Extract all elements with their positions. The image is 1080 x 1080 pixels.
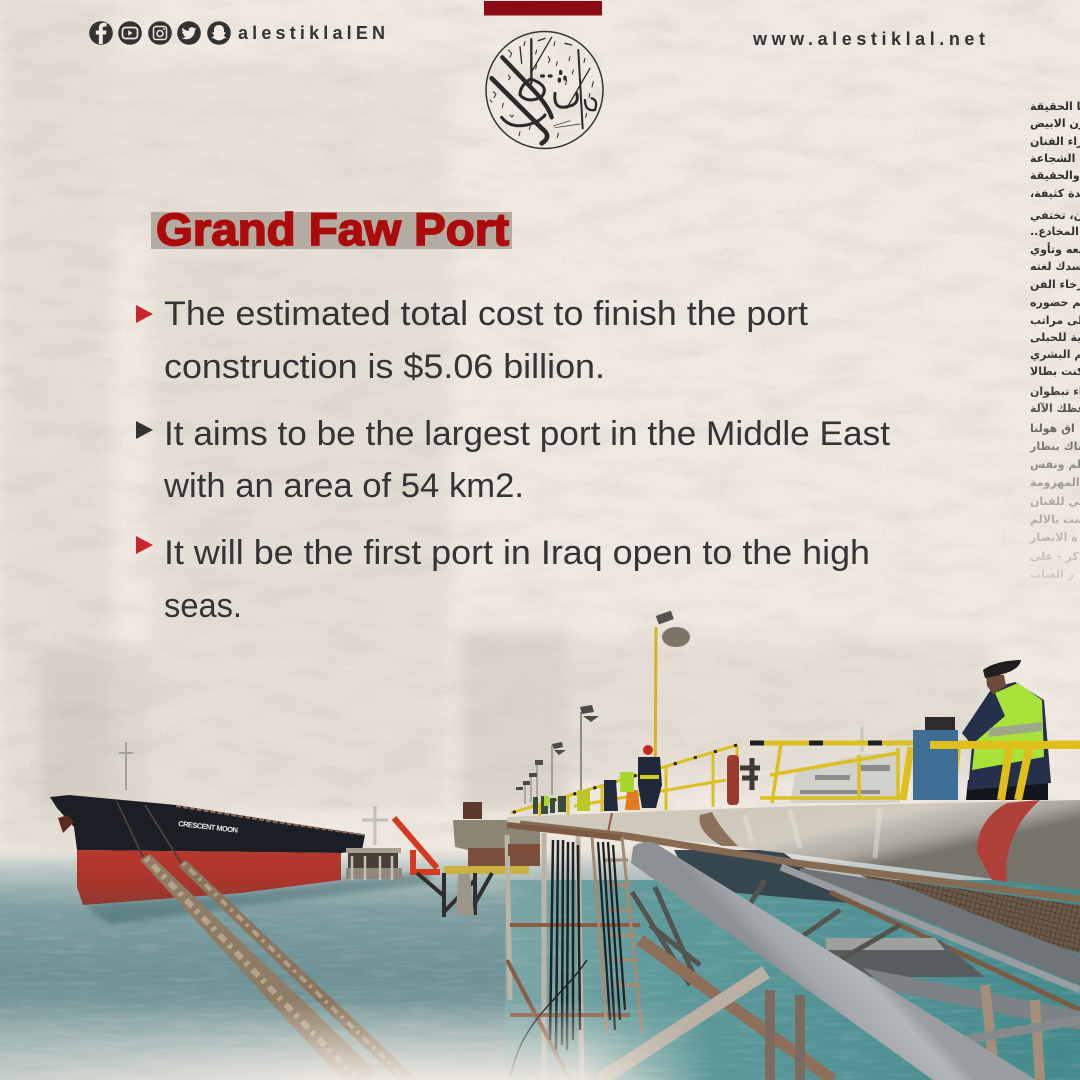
black cables	[550, 840, 580, 1050]
bullet 3 text: seas.	[164, 587, 242, 625]
hi-vis vest	[972, 683, 1044, 770]
red pipe band	[977, 800, 1040, 882]
newspaper clipping column: اق هولنا	[1030, 422, 1075, 435]
rust patch	[699, 812, 738, 846]
icon: twitter	[177, 21, 201, 45]
social handle: alestiklalEN	[238, 23, 385, 43]
bullet 2 text: It aims to be the largest port in the Middle East	[164, 415, 891, 453]
icon: snapchat	[207, 21, 231, 45]
bullet 2 text: with an area of 54 km2.	[163, 467, 524, 505]
social icons	[89, 21, 231, 45]
underside deck grating	[860, 875, 1080, 953]
hull behind pier	[674, 850, 851, 903]
bullet 3: open to high seas	[136, 534, 870, 625]
icon: youtube	[118, 21, 142, 45]
gray steel girder	[800, 868, 1080, 985]
mooring ropes	[117, 802, 418, 1080]
ship name: CRESCENT MOON	[178, 819, 238, 835]
bullet 1 text: The estimated total cost to finish the port	[164, 295, 809, 333]
newspaper clipping column: ر العتاب	[1030, 568, 1074, 581]
distant ship mast	[119, 742, 133, 790]
logo: Al-Estiklal calligraphy seal	[486, 32, 603, 148]
sea water	[0, 846, 1080, 1080]
yellow railings	[511, 743, 1080, 816]
newspaper clipping column: ية للحبلى	[1030, 331, 1080, 344]
website url: www.alestiklal.net	[752, 29, 985, 49]
large gray pipe	[631, 842, 1036, 1080]
cross beam	[826, 940, 985, 977]
distant jetty	[346, 806, 402, 880]
bullet 2: port area	[136, 415, 891, 505]
icon: instagram	[148, 21, 172, 45]
bullet 2 text	[163, 415, 891, 505]
red loading arm	[394, 818, 440, 872]
title text: Grand Faw Port	[156, 204, 509, 255]
newspaper clipping column: الشجاعة	[1030, 152, 1075, 165]
hull reflection	[84, 872, 430, 925]
ship black upper hull	[50, 795, 365, 853]
anchor	[58, 815, 74, 833]
railing over man	[930, 745, 1080, 800]
tanker ship Crescent Moon	[50, 795, 430, 925]
jetty frames and cables	[507, 825, 642, 1080]
newspaper clipping column	[1029, 100, 1080, 581]
deck railing	[176, 806, 365, 835]
worker with red helmet	[638, 745, 662, 808]
pier support truss	[600, 880, 1080, 1080]
steel frames	[507, 833, 582, 1080]
bullet 3 text	[164, 534, 870, 625]
newspaper clipping column: كر - على	[1030, 550, 1079, 563]
icon: facebook	[89, 21, 113, 45]
trousers	[966, 780, 1048, 800]
bullet 1: port cost	[136, 295, 809, 386]
valve post	[727, 755, 760, 805]
white ship behind the railing	[790, 727, 900, 803]
bullet 3 text: It will be the first port in Iraq open to the high	[164, 534, 870, 572]
bullet 1 text	[164, 295, 809, 386]
ship red lower hull	[77, 850, 341, 905]
bullet 1 text: construction is $5.06 billion.	[164, 348, 605, 386]
top red bar	[484, 1, 602, 16]
title: Grand Faw Port	[151, 204, 512, 255]
workers on pier	[533, 745, 662, 814]
newspaper clipping column: ة الابصار	[1029, 531, 1078, 544]
jacket	[962, 682, 1051, 790]
main white pipeline	[507, 800, 1080, 890]
bullet arrow dark	[136, 421, 153, 439]
bullet arrow red	[136, 536, 153, 554]
near jetty platform	[417, 802, 540, 917]
bullet arrow red	[136, 305, 153, 323]
lower gray pipe	[863, 968, 1080, 1030]
ladder	[592, 837, 642, 1033]
right railing	[750, 740, 1080, 746]
rusty rail below pipeline	[520, 824, 1080, 899]
title highlight	[151, 212, 512, 249]
rope 2	[178, 860, 418, 1080]
blue machinery	[913, 717, 958, 800]
standing man in hi-vis vest	[962, 660, 1051, 800]
large lamp	[655, 611, 690, 808]
photo: port scene	[0, 611, 1080, 1080]
face and hat	[986, 675, 1006, 694]
rope 1	[140, 854, 375, 1080]
street lamps	[516, 611, 690, 808]
left railing	[511, 745, 737, 816]
bullet list	[136, 295, 891, 625]
thin rope ends	[117, 802, 181, 863]
bottom fade into paper	[0, 1004, 704, 1080]
